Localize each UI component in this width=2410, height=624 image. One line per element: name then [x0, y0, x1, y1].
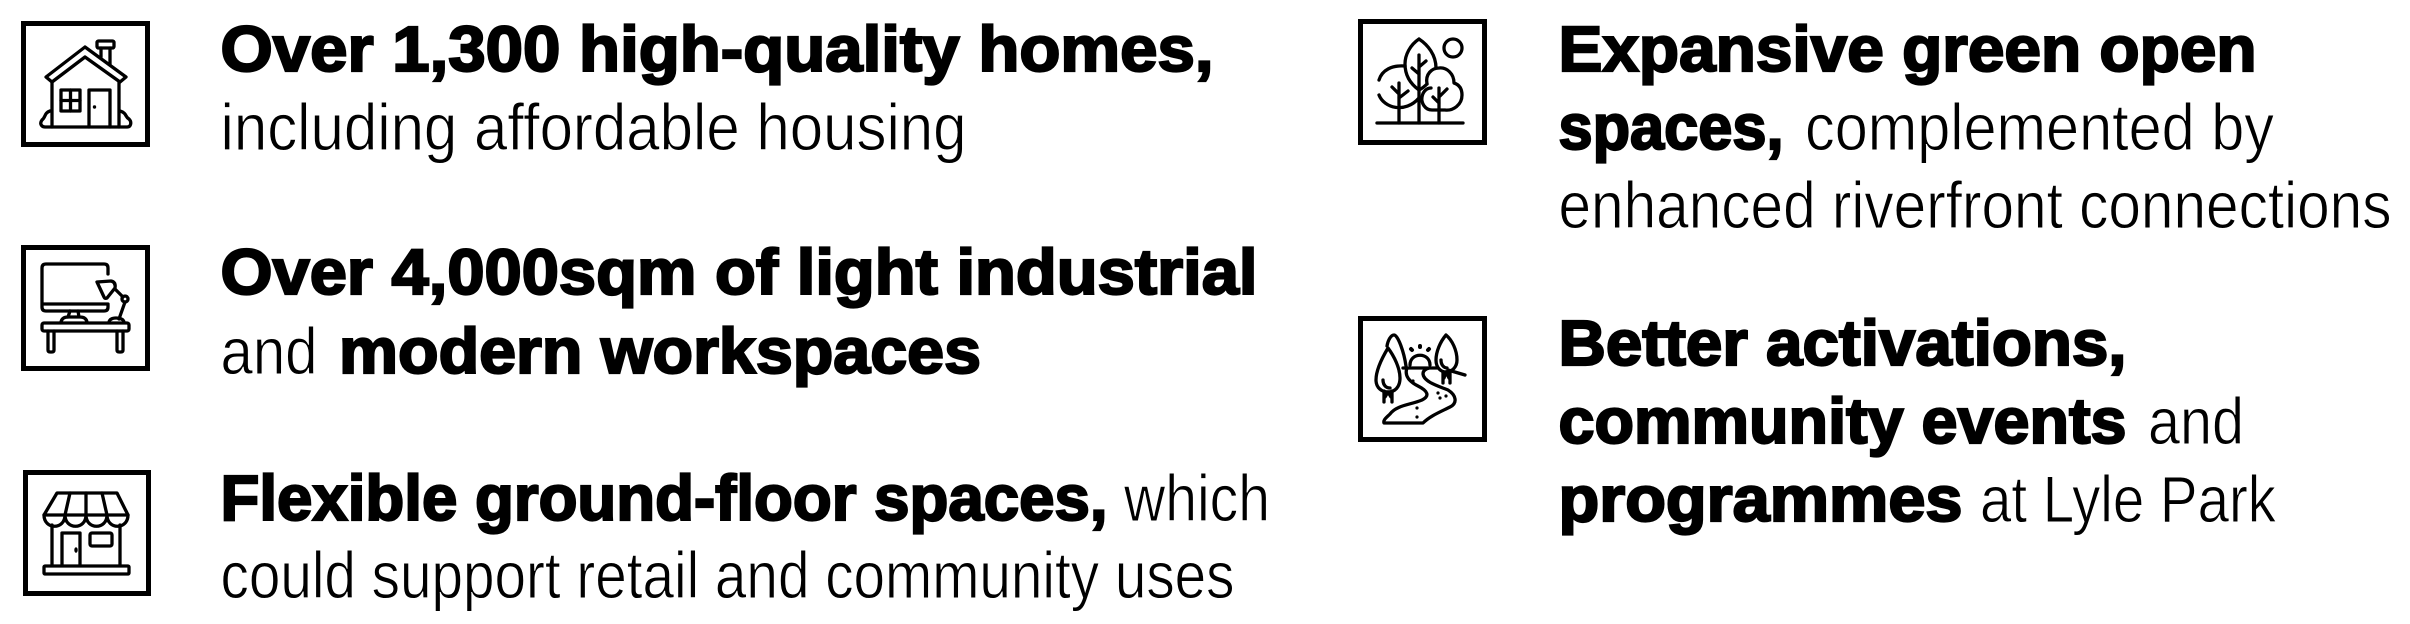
text: over 4,000sqm: modern workspaces	[339, 315, 981, 387]
item: ground-floor spaces	[26, 461, 1270, 612]
text: expansive green open spaces: Expansive green open	[1558, 13, 2256, 85]
text: better activations: programmes	[1558, 463, 1962, 535]
text: over 4,000sqm	[220, 236, 1258, 388]
text: expansive green open spaces: complemented by	[1805, 90, 2274, 164]
text: flexible ground-floor spaces: Flexible ground-floor spaces,	[220, 462, 1108, 534]
item: activations at Lyle Park	[1360, 307, 2277, 536]
icon: house	[24, 24, 148, 144]
text: over 1,300 homes	[220, 13, 1214, 164]
text: over 1,300 homes: including affordable housing	[220, 90, 966, 164]
icon: trees	[1360, 22, 1484, 142]
text: flexible ground-floor spaces	[220, 461, 1270, 612]
text: flexible ground-floor spaces: could support retail and community uses	[220, 538, 1234, 612]
text: better activations: community events	[1558, 385, 2126, 457]
item: workspaces	[24, 236, 1258, 388]
item: green open spaces	[1360, 13, 2392, 242]
text: over 4,000sqm: Over 4,000sqm of light industrial	[220, 236, 1258, 308]
text: better activations: at Lyle Park	[1980, 462, 2277, 536]
icon: desk with monitor and lamp	[24, 248, 148, 368]
text: over 4,000sqm: and	[220, 314, 318, 388]
text: better activations: and	[2148, 384, 2244, 458]
text: expansive green open spaces	[1558, 13, 2392, 242]
item: homes	[24, 13, 1214, 164]
icon: shopfront	[26, 472, 148, 594]
text: better activations: Better activations,	[1558, 307, 2126, 379]
text: flexible ground-floor spaces: which	[1123, 461, 1270, 535]
icon: park path with trees	[1360, 318, 1484, 440]
text: better activations	[1558, 307, 2277, 536]
text: over 1,300 homes: Over 1,300 high-quality homes,	[220, 13, 1214, 85]
text: expansive green open spaces: spaces,	[1558, 91, 1784, 163]
